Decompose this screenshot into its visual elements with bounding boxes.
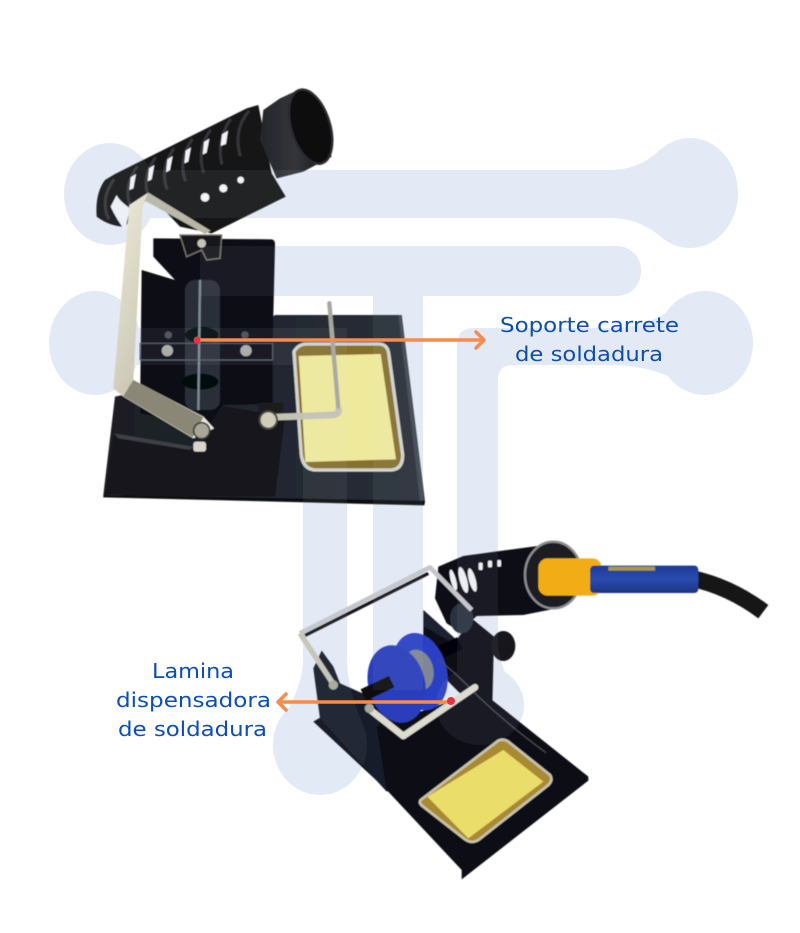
silver frame [113,193,214,452]
watermark tint over the photos [49,138,753,795]
blue solder spool [359,627,546,753]
base plate with sponge tray [103,315,425,505]
knob [491,631,515,661]
holder mouth [260,84,340,178]
photo: solder spool stand, front view [96,84,425,505]
pivot bracket [180,235,222,260]
arrow: spool holder callout [194,332,484,348]
silver wire frame [300,567,475,736]
label: Lamina dispensadora de soldadura: Lamina [152,659,234,683]
label: Soporte carrete de soldadura: Soporte carrete [500,313,679,337]
photo: stand in use with iron and spool [300,542,763,879]
label: Lamina dispensadora de soldadura: dispensadora [116,688,271,712]
arrow: dispenser blade callout [278,694,455,710]
stand side panels [313,610,494,792]
label: Lamina dispensadora de soldadura: de soldadura [118,717,267,741]
sponge tray [294,344,403,470]
clear strip with nuts [140,331,273,360]
solder wire guide [258,303,339,429]
label: Soporte carrete de soldadura: de soldadura [515,342,663,366]
sponge tray [420,740,551,842]
iron handle and cable [525,542,763,612]
background watermark logo [49,138,753,795]
clear spool tube [182,280,220,410]
label: Soporte carrete de soldadura [500,313,679,366]
rear stand panel [140,238,275,425]
iron holder [435,543,573,633]
lower bracket [105,406,285,497]
perforated iron holder [96,84,340,233]
black base plate [313,687,588,879]
label: Lamina dispensadora de soldadura [116,659,271,741]
